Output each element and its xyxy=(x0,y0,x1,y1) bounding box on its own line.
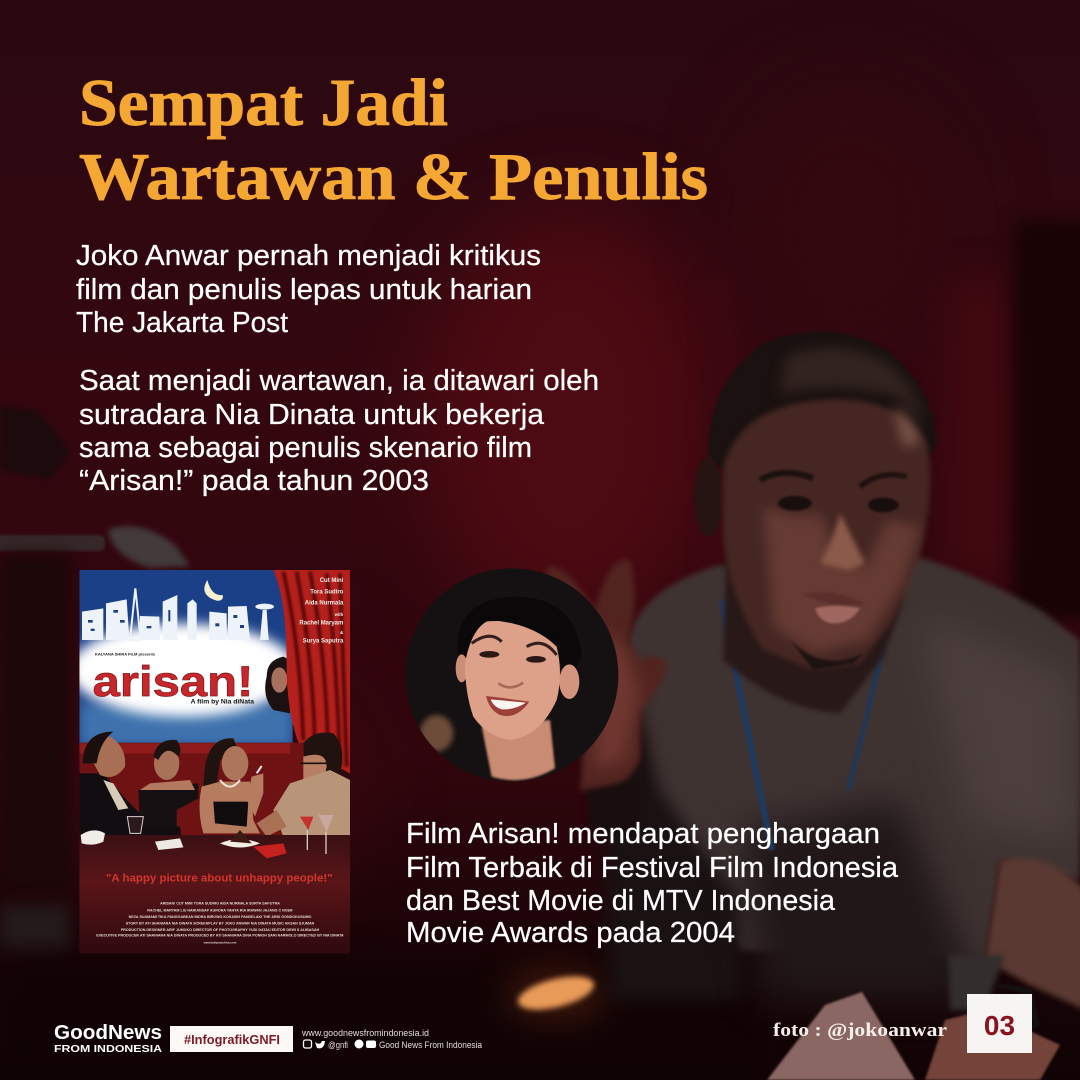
poster cast names: Surya Saputra xyxy=(303,639,344,645)
paragraph: awards: dan Best Movie di MTV Indonesia xyxy=(406,885,836,917)
man in grey t-shirt xyxy=(600,331,1080,1080)
footer links and social icons: Good News From Indonesia xyxy=(379,1040,482,1050)
hashtag badge xyxy=(170,1026,293,1052)
paragraph: awards: Film Terbaik di Festival Film Indonesia xyxy=(406,852,899,884)
footer links and social icons xyxy=(301,1028,482,1050)
page number badge: 03 xyxy=(984,1010,1015,1041)
poster cast names: Cut Mini xyxy=(320,578,344,584)
paragraph: offered by Nia Dinata: Saat menjadi wartawan, ia ditawari oleh xyxy=(79,365,599,397)
poster credits: EXECUTIVE PRODUCER ATI SHANIARA NIA DINATA PRODUCED BY ATI SHANIARA DINA PONIOH SARI NARMOLO DIRECTED BY NIA DINATA xyxy=(96,933,344,937)
ears xyxy=(456,654,466,682)
paragraph: offered by Nia Dinata: sama sebagai penulis skenario film xyxy=(79,432,532,464)
hashtag badge: #InfografikGNFI xyxy=(184,1032,280,1047)
footer logo: GoodNews from Indonesia: FROM INDONESIA xyxy=(54,1043,162,1055)
title: Sempat Jadi xyxy=(79,66,448,140)
icon: facebook xyxy=(354,1040,364,1048)
poster skyline xyxy=(82,588,274,640)
poster cast names: Tora Sudiro xyxy=(310,589,344,595)
paragraph: offered by Nia Dinata: “Arisan!” pada tahun 2003 xyxy=(79,465,429,497)
film poster: Arisan!: A film by Nia diNata xyxy=(191,699,255,705)
poster cast names: & xyxy=(340,630,344,635)
paragraph: critic and freelance writer: The Jakarta Post xyxy=(76,307,288,339)
raised hand xyxy=(545,560,668,830)
paragraph: critic and freelance writer: Joko Anwar pernah menjadi kritikus xyxy=(76,240,541,272)
poster title: arisan! xyxy=(93,658,253,706)
poster cast names: Rachel Maryam xyxy=(299,621,343,627)
lamp glow xyxy=(506,970,606,1016)
icon: youtube xyxy=(366,1040,376,1048)
page number badge xyxy=(967,994,1032,1053)
icon: instagram xyxy=(304,1040,312,1048)
poster cast names: Aida Nurmala xyxy=(305,601,344,607)
film poster: Arisan! xyxy=(70,570,350,953)
title xyxy=(79,66,708,214)
poster cast names: with xyxy=(334,612,344,617)
poster woman peeking xyxy=(265,657,290,713)
icon: twitter xyxy=(315,1041,325,1048)
poster red curtain xyxy=(273,570,350,773)
camera equipment at left xyxy=(0,405,190,950)
script pages xyxy=(767,992,915,1080)
poster cast names xyxy=(299,578,344,645)
paragraph: offered by Nia Dinata: sutradara Nia Dinata untuk bekerja xyxy=(79,399,545,431)
paragraph: awards: Film Arisan! mendapat penghargaan xyxy=(406,818,880,850)
poster credits: RACHEL MARYAM LIU HARIANSAP AURORA YAHYA RIA IRAWAN JAJANG C NOER xyxy=(147,908,293,912)
paragraph: awards: Movie Awards pada 2004 xyxy=(406,917,735,949)
hair xyxy=(458,596,582,668)
poster couch xyxy=(79,743,306,839)
face xyxy=(465,620,560,740)
poster figures xyxy=(80,732,350,835)
poster credits: www.kalyanashira.com xyxy=(203,940,237,944)
photo credit: foto : @jokoanwar xyxy=(773,1020,948,1041)
forearm and hand at bottom right xyxy=(985,858,1080,1010)
title: Wartawan & Penulis xyxy=(79,140,708,214)
poster credits: STORY BY ATI SHANIARA NIA DINATA SCREENPLAY BY JOKO ANWAR NIA DINATA MUSIC AKSAN SJUMAN xyxy=(126,922,315,926)
poster credits: ARISAN! CUT MINI TORA SUDIRO AIDA NURMALA SURYA SAPUTRA xyxy=(160,902,280,906)
footer logo: GoodNews from Indonesia xyxy=(54,1022,162,1055)
footer links and social icons: www.goodnewsfromindonesia.id xyxy=(301,1028,429,1038)
lanyard xyxy=(722,600,772,850)
poster sky xyxy=(70,570,297,747)
film poster: Arisan!: KALYANA SHIRA FILM presents xyxy=(95,651,156,656)
t-shirt xyxy=(628,552,1080,960)
footer links and social icons: @gnfi xyxy=(328,1040,348,1050)
poster tagline: "A happy picture about unhappy people!" xyxy=(106,872,333,884)
paragraph: critic and freelance writer: film dan penulis lepas untuk harian xyxy=(76,274,532,306)
poster table xyxy=(79,835,350,953)
poster credits xyxy=(96,902,344,944)
poster credits: NEZA SUAMAMI TIKA PANGGABEAN INDRA BIROWO KOSASIH PANDELAKI THE ARDI GONDOKUSUMO xyxy=(129,915,312,919)
footer logo: GoodNews from Indonesia: GoodNews xyxy=(54,1022,162,1044)
paragraph: awards xyxy=(406,818,899,949)
paragraph: offered by Nia Dinata xyxy=(79,365,599,497)
poster credits: PRODUCTION DESIGNER ARIF JUMOKO DIRECTOR OF PHOTOGRAPHY YUDI DATAU EDITOR DEWI S ALIBASAH xyxy=(121,928,320,932)
poster moon xyxy=(204,580,223,601)
neck and chest xyxy=(482,720,555,780)
head xyxy=(694,331,937,713)
bottom dark floor xyxy=(0,965,760,1080)
paragraph: critic and freelance writer xyxy=(76,240,541,339)
portrait: Nia Dinata in a circle xyxy=(405,568,618,782)
